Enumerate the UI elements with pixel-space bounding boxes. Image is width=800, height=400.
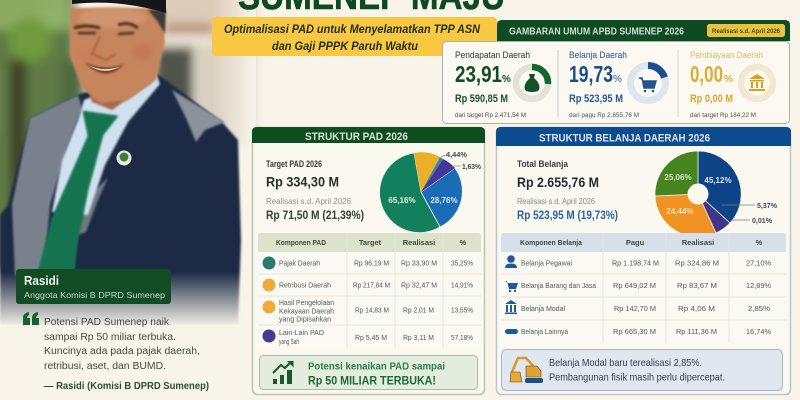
panel heading: STRUKTUR BELANJA DAERAH 2026 <box>539 132 710 144</box>
table: komponen belanja: Komponen Belanja <box>520 238 583 247</box>
PAD summary: Rp 334,30 M <box>266 174 339 190</box>
hair <box>148 10 166 34</box>
row: Hasil Pengelolaan: Hasil Pengelolaan <box>279 298 334 307</box>
icon: quote mark <box>23 312 39 325</box>
table: komponen PAD: % <box>460 238 467 247</box>
card: Pembiayaan Daerah: % <box>724 74 733 85</box>
callout: potensi PAD: Rp 50 MILIAR TERBUKA! <box>308 374 436 388</box>
belanja summary: Realisasi s.d. April 2026 <box>517 196 595 206</box>
row: Belanja Modal: Rp 142,70 M <box>614 304 656 313</box>
quote text <box>44 317 200 372</box>
pie chart: PAD: 1,63% <box>462 164 482 171</box>
row: Belanja Barang dan Jasa: Belanja Barang dan Jasa <box>521 281 597 290</box>
callout: belanja modal <box>502 350 782 390</box>
PAD summary <box>266 159 364 222</box>
table: komponen belanja <box>501 233 786 343</box>
right grey shoulder <box>172 90 225 142</box>
row: Pajak Daerah <box>262 256 473 270</box>
card: Belanja Daerah: dari pagu Rp 2.655,76 M <box>569 112 639 119</box>
row: Belanja Barang dan Jasa: Rp 649,02 M <box>613 281 656 290</box>
left grey jacket <box>12 95 82 275</box>
row: Belanja Barang dan Jasa: Rp 83,67 M <box>677 281 717 290</box>
belanja summary: Total Belanja <box>517 159 569 170</box>
table: komponen PAD: Target <box>359 238 382 247</box>
quote text: retribusi, aset, dan BUMD. <box>44 361 166 372</box>
gauge icon: money bag <box>516 67 548 99</box>
row: Hasil Pengelolaan: yang Dipisahkan <box>279 314 331 324</box>
belanja summary: Rp 523,95 M (19,73%) <box>517 210 618 222</box>
card: Pendapatan Daerah: Rp 590,85 M <box>455 93 508 105</box>
row: Lain-Lain PAD: Rp 3,11 M <box>403 333 434 342</box>
quote text: sampai Rp 50 miliar terbuka. <box>44 332 176 343</box>
card: Pendapatan Daerah: 23,91 <box>455 61 502 87</box>
row: Retribusi Daerah: Retribusi Daerah <box>279 280 331 290</box>
row: Belanja Lainnya: Rp 111,36 M <box>676 327 717 336</box>
row: Retribusi Daerah: Rp 32,47 M <box>401 280 437 290</box>
row: Retribusi Daerah <box>262 278 473 292</box>
pie chart: PAD <box>380 152 482 233</box>
donut chart: belanja <box>655 151 778 237</box>
table: komponen belanja: Realisasi <box>682 238 714 247</box>
card: Pendapatan Daerah: % <box>502 74 511 85</box>
icon: growth chart <box>273 361 294 384</box>
donut chart: belanja: 24,44% <box>666 207 694 216</box>
cap <box>72 0 166 13</box>
table: komponen belanja: % <box>756 238 763 247</box>
row: Lain-Lain PAD: 57,18% <box>451 333 473 342</box>
pie chart: PAD: 65,16% <box>388 196 416 205</box>
gauge icon: cart <box>630 66 666 100</box>
name plate: Anggota Komisi B DPRD Sumenep <box>24 291 166 300</box>
card: Pembiayaan Daerah: 0,00 <box>690 61 723 87</box>
callout: belanja modal: Pembangunan fisik masih perlu dipercepat. <box>549 372 725 384</box>
row: Belanja Lainnya: 16,74% <box>746 327 771 336</box>
table: komponen PAD <box>258 233 481 348</box>
PAD summary: Target PAD 2026 <box>266 159 322 170</box>
panel: APBD overview <box>442 20 790 124</box>
callout: belanja modal: Belanja Modal baru terealisasi 2,85%. <box>549 357 702 369</box>
row: Belanja Modal: 2,85% <box>748 304 770 313</box>
panel heading: GAMBARAN UMUM APBD SUMENEP 2026 <box>509 26 684 38</box>
pie chart: PAD: 28,76% <box>430 196 458 205</box>
donut chart: belanja: 45,12% <box>704 176 732 185</box>
donut chart: belanja: 25,06% <box>664 173 692 182</box>
subtitle banner: dan Gaji PPPK Paruh Waktu <box>272 41 418 53</box>
panel: Struktur Belanja Daerah <box>496 127 791 394</box>
subtitle banner <box>212 17 497 56</box>
quote text: Kuncinya ada pada pajak daerah, <box>44 346 200 357</box>
row: Belanja Lainnya <box>505 327 771 336</box>
name plate: Rasidi <box>24 274 59 288</box>
row: Lain-Lain PAD: Rp 5,45 M <box>355 333 387 342</box>
row: Pajak Daerah: Pajak Daerah <box>279 258 320 268</box>
card: Pendapatan Daerah <box>455 50 548 119</box>
icon: excavator <box>510 358 543 383</box>
row: Lain-Lain PAD <box>262 328 473 346</box>
belanja summary <box>517 159 618 222</box>
card: Pembiayaan Daerah: dari target Rp 184,22 M <box>690 112 756 119</box>
suit <box>0 72 241 325</box>
gauge icon: bank <box>741 67 773 99</box>
card: Pendapatan Daerah: dari target Rp 2.471,54 M <box>455 112 526 119</box>
shirt <box>52 70 160 215</box>
row: Belanja Pegawai: Belanja Pegawai <box>521 258 572 268</box>
row: Belanja Lainnya: Rp 665,30 M <box>613 327 656 336</box>
card: Pendapatan Daerah: Pendapatan Daerah <box>455 50 530 61</box>
callout: potensi PAD: Potensi kenaikan PAD sampai <box>308 360 445 372</box>
quote block <box>23 312 209 392</box>
pie chart: PAD: 4,44% <box>446 152 468 159</box>
card: Belanja Daerah: Rp 523,95 M <box>569 93 623 105</box>
row: Retribusi Daerah: 14,91% <box>451 280 473 290</box>
row: Belanja Lainnya: Belanja Lainnya <box>521 327 569 336</box>
row: Lain-Lain PAD: Lain-Lain PAD <box>279 328 325 337</box>
panel: Struktur PAD <box>252 127 485 394</box>
row: Belanja Barang dan Jasa: 12,89% <box>746 281 771 290</box>
card: Pembiayaan Daerah <box>690 50 773 119</box>
portrait photo of Rasidi <box>0 0 256 327</box>
name plate <box>16 269 171 304</box>
panel heading: STRUKTUR PAD 2026 <box>305 131 408 143</box>
card: Belanja Daerah: Belanja Daerah <box>569 50 627 61</box>
table: komponen belanja: Pagu <box>626 238 645 247</box>
row: Belanja Pegawai: Rp 324,86 M <box>675 258 719 268</box>
table: komponen PAD: Realisasi <box>403 238 435 247</box>
row: Belanja Pegawai: 27,10% <box>746 258 771 268</box>
row: Pajak Daerah: 35,25% <box>451 258 473 268</box>
date badge: Realisasi s.d. April 2026 <box>712 29 781 35</box>
donut chart: belanja: 5,37% <box>757 203 778 210</box>
card: Belanja Daerah: % <box>613 74 622 85</box>
row: Belanja Pegawai: Rp 1.198,74 M <box>612 258 659 268</box>
subtitle banner: Optimalisasi PAD untuk Menyelamatkan TPP ASN <box>224 24 481 36</box>
pin <box>116 150 132 166</box>
brows and eyes <box>74 24 138 60</box>
table: komponen PAD: Komponen PAD <box>276 238 327 247</box>
card: Pembiayaan Daerah: Rp 0,00 M <box>690 93 733 105</box>
tie <box>38 111 118 272</box>
row: Pajak Daerah: Rp 33,90 M <box>401 258 437 268</box>
face <box>70 8 165 103</box>
card: Belanja Daerah <box>569 50 666 119</box>
row: Hasil Pengelolaan: Kekayaan Daerah <box>279 306 334 316</box>
PAD summary: Rp 71,50 M (21,39%) <box>266 210 364 222</box>
row: Hasil Pengelolaan: Rp 2,01 M <box>403 306 434 314</box>
donut chart: belanja: 0,01% <box>752 218 773 225</box>
quote text: Potensi PAD Sumenep naik <box>44 317 170 328</box>
row: Belanja Pegawai <box>505 255 771 268</box>
row: Belanja Modal <box>505 300 770 314</box>
row: Belanja Barang dan Jasa <box>505 281 771 292</box>
row: Hasil Pengelolaan: 13,55% <box>451 306 473 314</box>
row: Lain-Lain PAD: yang Sah <box>279 337 299 346</box>
quote attribution: — Rasidi (Komisi B DPRD Sumenep) <box>44 381 209 392</box>
date badge <box>707 24 785 37</box>
grey lapel strip <box>76 178 108 236</box>
callout: potensi PAD <box>260 356 478 390</box>
row: Hasil Pengelolaan: Rp 14,83 M <box>355 306 389 314</box>
smile <box>84 62 124 74</box>
row: Pajak Daerah: Rp 96,19 M <box>354 258 389 268</box>
neck <box>84 74 152 110</box>
card: Pembiayaan Daerah: Pembiayaan Daerah <box>690 50 763 61</box>
card: Belanja Daerah: 19,73 <box>569 61 613 87</box>
row: Belanja Modal: Belanja Modal <box>521 304 565 313</box>
PAD summary: Realisasi s.d. April 2026 <box>266 196 351 206</box>
row: Belanja Modal: Rp 4,06 M <box>678 304 715 313</box>
belanja summary: Rp 2.655,76 M <box>517 174 599 190</box>
row: Hasil Pengelolaan <box>262 298 473 324</box>
row: Retribusi Daerah: Rp 217,84 M <box>353 280 390 290</box>
